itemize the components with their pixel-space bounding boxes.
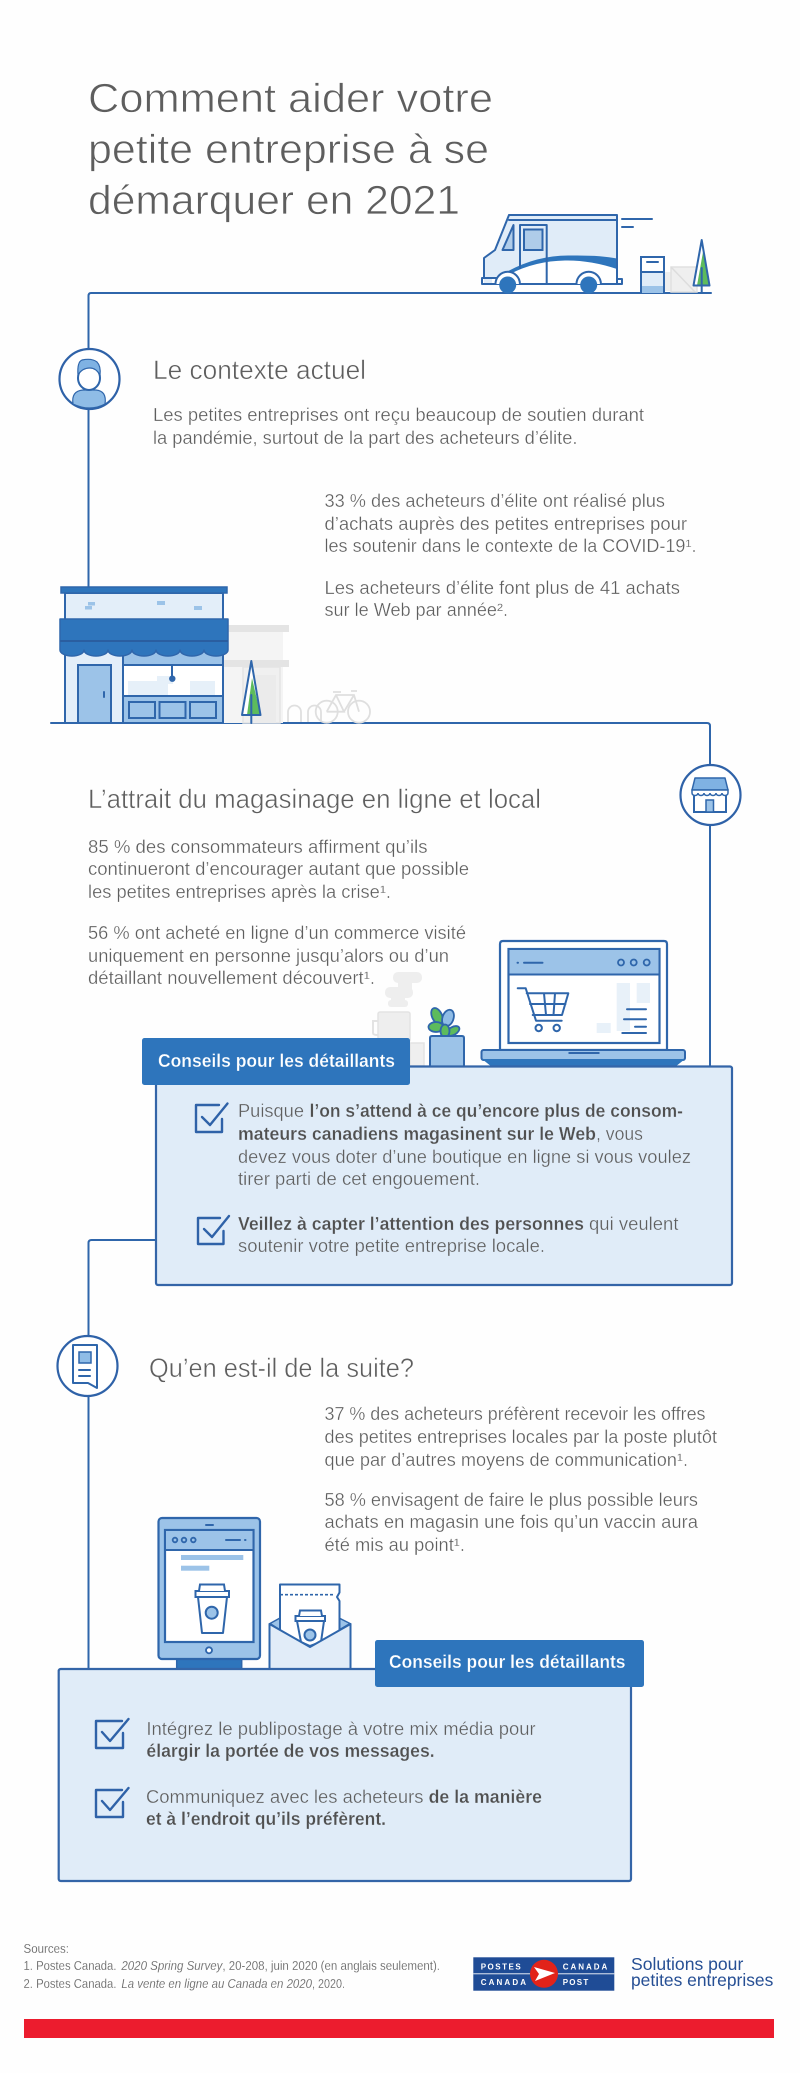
tip text 3: Intégrez le publipostage à votre mix média pour [146, 1719, 536, 1739]
illustration: potted plant [428, 1006, 464, 1066]
tip text 1: l’on s’attend à ce qu’encore plus de consom- [310, 1101, 683, 1121]
text: sources: , 20-208, juin 2020 (en anglais seulement). [222, 1959, 440, 1973]
tip text 1 [238, 1101, 691, 1189]
tip text 2: soutenir votre petite entreprise locale. [238, 1236, 545, 1256]
heading: la suite: Qu’en est-il de la suite? [149, 1353, 414, 1383]
title: Comment aider votre [88, 75, 493, 121]
tip text 3 [146, 1719, 536, 1761]
text: future statistics: des petites entreprises locales par la poste plutôt [324, 1427, 717, 1447]
text: future statistics: 37 % des acheteurs préfèrent recevoir les offres [324, 1404, 706, 1424]
icon: checkbox 4 [96, 1788, 128, 1817]
icon: checkbox 2 [198, 1216, 229, 1244]
tip text 1: mateurs canadiens magasinent sur le Web [238, 1124, 596, 1144]
illustration: delivery van [482, 215, 652, 294]
text: elite buyers statistics [324, 491, 696, 620]
tip text 4: Communiquez avec les acheteurs [146, 1787, 424, 1807]
tip text 1: devez vous doter d’une boutique en ligne si vous voulez [238, 1147, 691, 1167]
illustration: grey neighbouring building [222, 625, 289, 723]
text: sources: Sources: [24, 1942, 69, 1956]
text: future statistics: que par d’autres moyens de communication¹. [324, 1450, 688, 1470]
icon: checkbox 3 [96, 1719, 128, 1748]
tip text 4: et à l’endroit qu’ils préfèrent. [146, 1809, 386, 1829]
tab: conseils pour les détaillants [142, 1038, 410, 1085]
text: solutions pour petites entreprises: petites entreprises [631, 1970, 774, 1990]
tip text 1: tirer parti de cet engouement. [238, 1169, 480, 1189]
text: consumer statistics: 85 % des consommateurs affirment qu’ils [88, 837, 428, 857]
connector line: panel to section three [88, 1240, 156, 1669]
panel: retailer tips 1 [142, 1038, 732, 1285]
text: sources: 1. Postes Canada. [24, 1959, 116, 1973]
text: consumer statistics: uniquement en personne jusqu’alors ou d’un [88, 946, 449, 966]
text: contexte intro: Les petites entreprises ont reçu beaucoup de soutien durant [153, 405, 644, 425]
connector line: top road and left vertical [88, 293, 711, 587]
title [88, 75, 493, 223]
heading: le contexte actuel: Le contexte actuel [153, 355, 366, 385]
connector line: shop ground to right vertical [51, 723, 710, 1067]
text: consumer statistics: continueront d’encourager autant que possible [88, 859, 469, 879]
tip text 1: , vous [596, 1124, 643, 1144]
title: démarquer en 2021 [88, 177, 460, 223]
logo: Postes Canada: POSTES [481, 1962, 521, 1971]
text: sources: La vente en ligne au Canada en 2020 [121, 1977, 312, 1991]
text: solutions pour petites entreprises: Solutions pour [631, 1954, 743, 1974]
tip text 2 [238, 1214, 678, 1256]
tab: conseils pour les détaillants: Conseils pour les détaillants [389, 1652, 626, 1672]
text: sources: 2. Postes Canada. [24, 1977, 116, 1991]
text: sources [24, 1942, 440, 1991]
icon: checkbox 1 [196, 1104, 228, 1132]
text: consumer statistics: les petites entreprises après la crise¹. [88, 882, 391, 902]
text: consumer statistics: détaillant nouvellement découvert¹. [88, 968, 375, 988]
illustration: steaming mug [373, 972, 424, 1066]
text: consumer statistics [88, 837, 469, 988]
title: petite entreprise à se [88, 126, 489, 172]
text: future statistics: 58 % envisagent de faire le plus possible leurs [324, 1490, 698, 1510]
text: sources: , 2020. [312, 1977, 345, 1991]
illustration: tree by the shop [242, 661, 260, 723]
tip text 4: de la manière [429, 1787, 542, 1807]
footer red bar [24, 2019, 774, 2038]
tip text 1: Puisque [238, 1101, 304, 1121]
tip text 3: élargir la portée de vos messages. [146, 1741, 435, 1761]
text: future statistics: achats en magasin une fois qu’un vaccin aura [324, 1512, 699, 1532]
text: future statistics: été mis au point¹. [324, 1535, 465, 1555]
illustration: laptop with shopping cart [482, 941, 685, 1067]
illustration: storefront [60, 587, 228, 723]
tab: conseils pour les détaillants [375, 1640, 644, 1687]
text: future statistics [324, 1404, 717, 1555]
illustration: bicycle and rack [288, 691, 370, 723]
heading: attrait du magasinage: L’attrait du magasinage en ligne et local [88, 784, 541, 814]
text: consumer statistics: 56 % ont acheté en ligne d’un commerce visité [88, 923, 466, 943]
icon: store [680, 765, 740, 825]
logo: Postes Canada [473, 1957, 614, 1991]
text: elite buyers statistics: les soutenir dans le contexte de la COVID-19¹. [324, 536, 696, 556]
illustration: tablet with coffee cup [158, 1518, 260, 1669]
panel: retailer tips 2 [59, 1640, 644, 1881]
tip text 2: qui veulent [589, 1214, 678, 1234]
icon: booklet [58, 1336, 118, 1396]
text: contexte intro [153, 405, 644, 448]
text: elite buyers statistics: Les acheteurs d’élite font plus de 41 achats [324, 578, 680, 598]
tip text 4 [146, 1787, 542, 1829]
logo: Postes Canada: CANADA [563, 1962, 608, 1971]
text: elite buyers statistics: 33 % des acheteurs d’élite ont réalisé plus [324, 491, 665, 511]
illustration: mailbox, envelope and tree [641, 240, 710, 293]
text: elite buyers statistics: sur le Web par année². [324, 600, 508, 620]
text: contexte intro: la pandémie, surtout de la part des acheteurs d’élite. [153, 428, 578, 448]
icon: shopper [60, 349, 120, 409]
text: sources: 2020 Spring Survey [120, 1959, 223, 1973]
tab: conseils pour les détaillants: Conseils pour les détaillants [158, 1051, 395, 1071]
illustration: envelope with coupon [270, 1584, 350, 1669]
tip text 2: Veillez à capter l’attention des personnes [238, 1214, 584, 1234]
logo: Postes Canada: POST [563, 1978, 588, 1987]
text: solutions pour petites entreprises [631, 1954, 774, 1990]
logo: Postes Canada: CANADA [481, 1978, 526, 1987]
text: elite buyers statistics: d’achats auprès des petites entreprises pour [324, 514, 687, 534]
